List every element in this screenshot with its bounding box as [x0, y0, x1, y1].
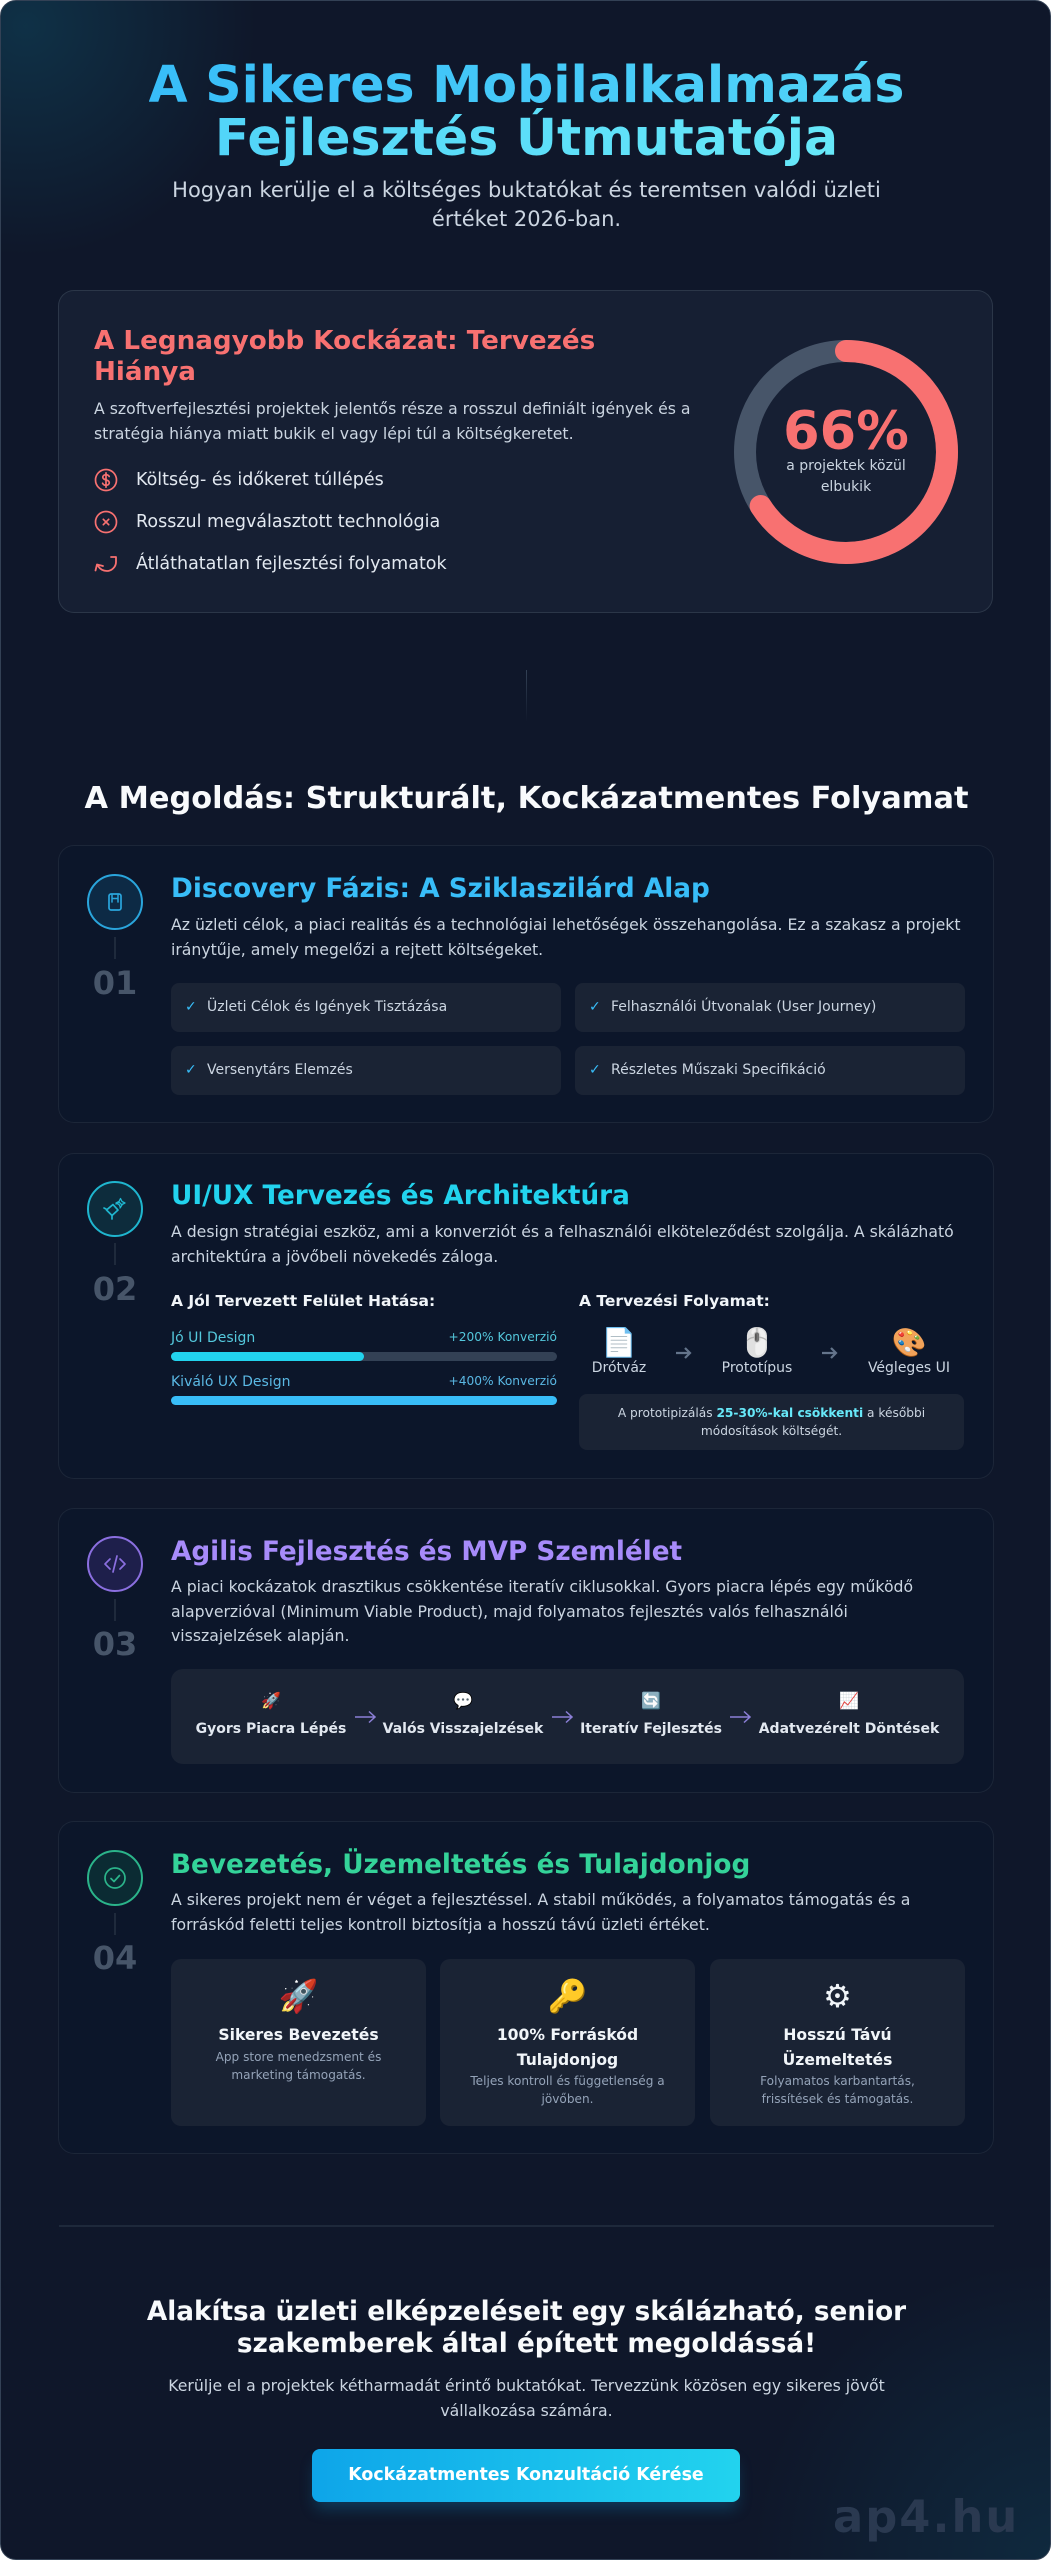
- arrow: [822, 1347, 838, 1359]
- step description: [171, 915, 961, 958]
- panel: risk: [58, 290, 993, 613]
- card: launch: Sikeres Bevezetés: [218, 2026, 379, 2044]
- watermark: ap4.hu: [833, 2490, 1019, 2543]
- donut value: 66%: [783, 401, 909, 462]
- CTA heading: Alakítsa üzleti elképzeléseit egy skálázható, senior: [147, 2297, 906, 2327]
- subtitle: Hogyan kerülje el a költséges buktatókat és teremtsen valódi üzleti: [172, 178, 881, 202]
- title: [149, 55, 904, 167]
- flow step: data driven: 📈: [839, 1691, 859, 1710]
- card: launch: marketing támogatás.: [231, 2068, 366, 2082]
- risk heading: Hiánya: [94, 357, 196, 387]
- step: wireframe: Drótváz: [592, 1360, 646, 1376]
- icon: discovery: [87, 874, 143, 930]
- step number 02: 02: [93, 1270, 137, 1308]
- icon: x circle: [94, 510, 118, 534]
- step: wireframe: [592, 1326, 646, 1376]
- flow step: feedback: [382, 1691, 544, 1737]
- process heading: A Tervezési Folyamat:: [579, 1292, 770, 1310]
- card: operations: Hosszú Távú: [783, 2026, 892, 2044]
- flow step: fast launch: 🚀: [261, 1691, 281, 1710]
- step heading: Agilis Fejlesztés és MVP Szemlélet: [171, 1537, 682, 1567]
- step: prototype: 🖱️: [740, 1326, 774, 1359]
- CTA heading: [147, 2297, 906, 2359]
- title: Fejlesztés Útmutatója: [215, 108, 838, 167]
- section heading: A Megoldás: Strukturált, Kockázatmentes Folyamat: [84, 781, 968, 816]
- chip: goals: Üzleti Célok és Igények Tisztázása: [207, 999, 447, 1015]
- chart: design impact: [170, 1292, 557, 1405]
- step description: forráskód feletti teljes kontroll biztosítja a hosszú távú üzleti értéket.: [171, 1914, 710, 1934]
- flow step: feedback: 💬: [453, 1691, 473, 1710]
- card: operations: [710, 1959, 965, 2126]
- arrow: [355, 1711, 376, 1723]
- card: source code: 100% Forráskód: [497, 2026, 638, 2044]
- step description: A design stratégiai eszköz, ami a konverziót és a felhasználói elköteleződést szolgálja. A skálázható: [171, 1222, 954, 1241]
- step description: visszajelzések alapján.: [171, 1626, 349, 1645]
- step number 01: 01: [93, 964, 137, 1002]
- risk description: [94, 398, 690, 442]
- flow step: data driven: Adatvezérelt Döntések: [759, 1721, 939, 1737]
- chip: competitors: [171, 1046, 561, 1095]
- agile flow: [171, 1669, 964, 1764]
- donut label: elbukik: [821, 479, 871, 495]
- card: source code: [440, 1959, 695, 2126]
- icon: code: [87, 1536, 143, 1592]
- donut label: [786, 458, 906, 495]
- step description: A piaci kockázatok drasztikus csökkentése iteratív ciklusokkal. Gyors piacra lépés egy működő: [171, 1577, 913, 1596]
- chip: specification: [575, 1046, 965, 1095]
- risk heading: [94, 326, 595, 387]
- flow step: fast launch: [196, 1691, 346, 1737]
- flow step: data driven: [758, 1691, 940, 1737]
- card: source code: Teljes kontroll és függetlenség a: [470, 2074, 665, 2088]
- step: final UI: 🎨: [892, 1326, 926, 1359]
- title: A Sikeres Mobilalkalmazás: [149, 55, 904, 114]
- risk heading: A Legnagyobb Kockázat: Tervezés: [94, 326, 595, 356]
- icon: dollar: [94, 468, 118, 492]
- card: operations: frissítések és támogatás.: [762, 2092, 913, 2106]
- chip: specification: ✓: [589, 1062, 601, 1078]
- chip: user journey: Felhasználói Útvonalak (User Journey): [611, 999, 876, 1015]
- card: source code: jövőben.: [542, 2092, 593, 2106]
- bar: good UI: +200% Konverzió: [449, 1330, 557, 1344]
- step: final UI: [868, 1326, 950, 1376]
- bar: great UX: [171, 1374, 557, 1405]
- chart heading: A Jól Tervezett Felület Hatása:: [171, 1292, 435, 1310]
- card: launch: App store menedzsment és: [216, 2050, 381, 2064]
- flow step: feedback: Valós Visszajelzések: [383, 1721, 543, 1737]
- step: prototype: [722, 1326, 792, 1376]
- step description: Az üzleti célok, a piaci realitás és a technológiai lehetőségek összehangolása. Ez a szakasz a projekt: [171, 915, 961, 934]
- donut label: a projektek közül: [786, 458, 906, 474]
- step: final UI: Végleges UI: [868, 1360, 950, 1376]
- step: wireframe: 📄: [602, 1326, 636, 1359]
- icon: check: [87, 1850, 143, 1906]
- chip: specification: Részletes Műszaki Specifikáció: [611, 1062, 826, 1078]
- card: operations: Üzemeltetés: [783, 2050, 892, 2068]
- step heading: Bevezetés, Üzemeltetés és Tulajdonjog: [171, 1850, 750, 1880]
- prototype note: módosítások költségét.: [701, 1424, 842, 1438]
- card: operations: Folyamatos karbantartás,: [760, 2074, 915, 2088]
- card: launch: 🚀: [279, 1977, 318, 2015]
- design process flow: [579, 1292, 964, 1450]
- step heading: UI/UX Tervezés és Architektúra: [171, 1181, 630, 1211]
- card: source code: 🔑: [548, 1977, 587, 2015]
- card: operations: ⚙: [823, 1977, 852, 2015]
- step description: A sikeres projekt nem ér véget a fejlesztéssel. A stabil működés, a folyamatos támogatás és a: [171, 1890, 910, 1909]
- risk description: A szoftverfejlesztési projektek jelentős része a rosszul definiált igények és a: [94, 398, 690, 418]
- risk item: process: Átláthatatlan fejlesztési folyamatok: [136, 554, 447, 574]
- chip: goals: ✓: [185, 999, 197, 1015]
- chip: user journey: ✓: [589, 999, 601, 1015]
- step description: [171, 1577, 913, 1645]
- risk description: stratégia hiánya miatt bukik el vagy lépi túl a költségkeretet.: [94, 424, 574, 442]
- risk item: budget: Költség- és időkeret túllépés: [136, 470, 384, 490]
- panel: step 03 agile: [58, 1508, 994, 1793]
- prototype note: [579, 1394, 964, 1450]
- CTA text: [168, 2376, 885, 2420]
- step description: [171, 1890, 910, 1934]
- bar: good UI: [170, 1330, 557, 1361]
- chip: goals: [171, 983, 561, 1032]
- bar: good UI: Jó UI Design: [171, 1330, 255, 1346]
- chip: user journey: [575, 983, 965, 1032]
- flow step: fast launch: Gyors Piacra Lépés: [196, 1721, 346, 1737]
- step: prototype: Prototípus: [722, 1360, 792, 1376]
- subtitle: [172, 178, 881, 231]
- step number 04: 04: [93, 1939, 137, 1977]
- icon: return arrow: [94, 556, 117, 572]
- CTA heading: szakemberek által épített megoldássá!: [237, 2329, 816, 2359]
- CTA text: Kerülje el a projektek kétharmadát érintő buktatókat. Tervezzünk közösen egy sikeres jövőt: [168, 2376, 885, 2395]
- step description: [171, 1222, 954, 1266]
- arrow: [552, 1711, 573, 1723]
- chip: competitors: ✓: [185, 1062, 197, 1078]
- bar: great UX: Kiváló UX Design: [171, 1374, 290, 1390]
- subtitle: értéket 2026-ban.: [432, 207, 621, 231]
- step heading: Discovery Fázis: A Sziklaszilárd Alap: [171, 874, 710, 904]
- panel: step 01 discovery: [58, 845, 994, 1123]
- bar: great UX: +400% Konverzió: [449, 1374, 557, 1388]
- icon: design: [87, 1181, 143, 1237]
- step description: iránytűje, amely megelőzi a rejtett költségeket.: [171, 940, 543, 958]
- connector line: [526, 670, 527, 722]
- panel: step 04 launch: [58, 1821, 994, 2154]
- CTA text: vállalkozása számára.: [440, 2401, 613, 2420]
- panel: step 02 design: [58, 1153, 994, 1479]
- flow step: iterative: 🔄: [641, 1691, 661, 1710]
- flow step: iterative: Iteratív Fejlesztés: [580, 1721, 722, 1737]
- CTA button: [312, 2449, 740, 2502]
- donut chart: 66%: [734, 340, 958, 564]
- CTA button: Kockázatmentes Konzultáció Kérése: [348, 2465, 704, 2485]
- step description: alapverzióval (Minimum Viable Product), majd folyamatos fejlesztés valós felhasználói: [171, 1602, 848, 1620]
- flow step: iterative: [580, 1691, 722, 1737]
- prototype note: A prototipizálás 25-30%-kal csökkenti a későbbi: [618, 1406, 925, 1420]
- card: launch: [171, 1959, 426, 2126]
- chip: competitors: Versenytárs Elemzés: [207, 1062, 353, 1078]
- card: source code: Tulajdonjog: [517, 2050, 618, 2068]
- step number 03: 03: [93, 1625, 137, 1663]
- arrow: [730, 1711, 751, 1723]
- step description: architektúra a jövőbeli növekedés záloga.: [171, 1246, 498, 1266]
- arrow: [676, 1347, 692, 1359]
- risk item: technology: Rosszul megválasztott technológia: [136, 512, 440, 532]
